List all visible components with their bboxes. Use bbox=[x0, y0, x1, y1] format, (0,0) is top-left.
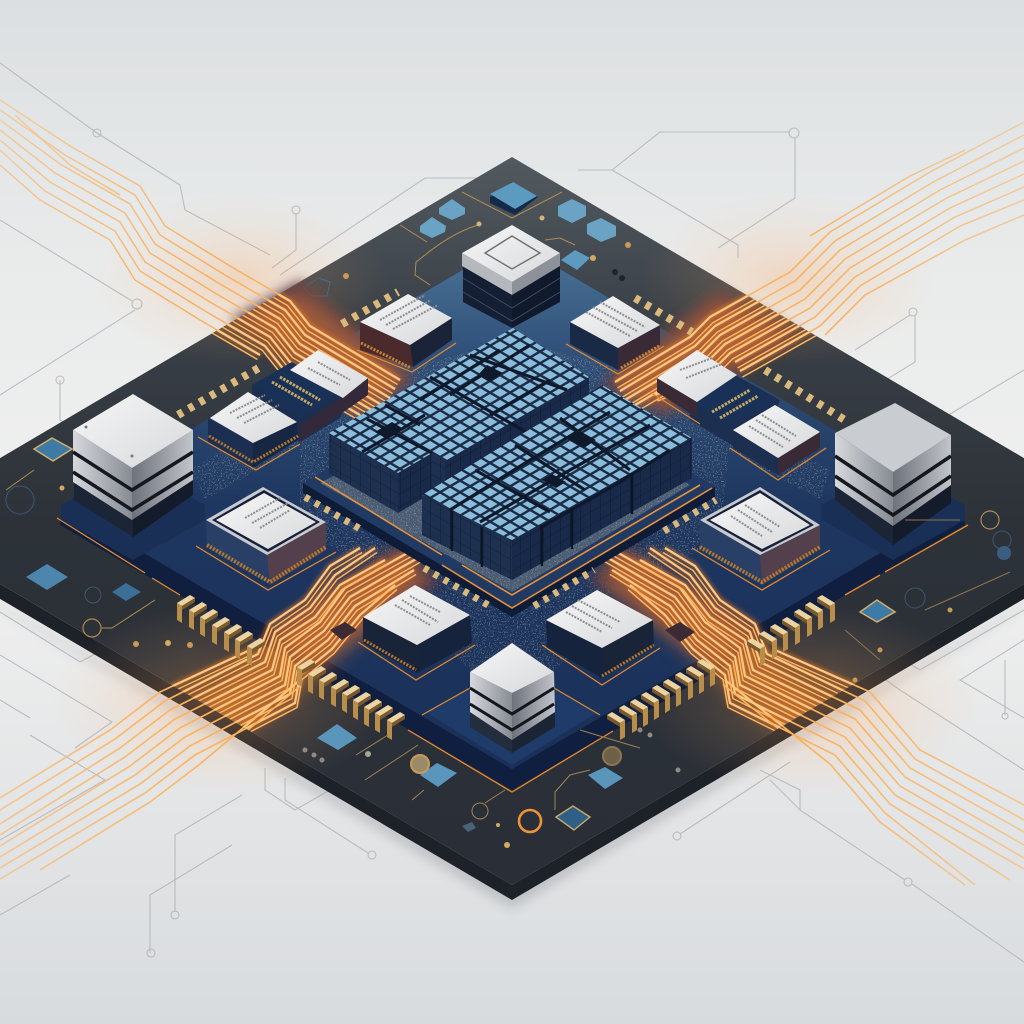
outer traces bbox=[0, 100, 1024, 885]
central memory block: lower bbox=[422, 385, 692, 580]
stack: bottom bbox=[422, 643, 600, 765]
big stack: right bbox=[822, 403, 965, 560]
chip: top left bbox=[357, 294, 456, 372]
chip cluster: left bbox=[198, 350, 368, 470]
stack: top bbox=[462, 225, 560, 328]
trace pad shadows bbox=[230, 280, 800, 670]
board detail: blue hexagons and pads, top bbox=[304, 182, 631, 296]
substrate: large blue package bbox=[57, 241, 968, 792]
chip: mid left bbox=[196, 487, 336, 590]
chip: mid right bbox=[692, 487, 830, 590]
gold contact pins bbox=[177, 595, 835, 740]
board shadow bbox=[0, 545, 1024, 908]
chip: bottom left bbox=[330, 585, 475, 680]
big stack: left bbox=[61, 394, 205, 560]
chip: top right bbox=[566, 296, 664, 374]
small gold pads bbox=[178, 292, 848, 422]
substrate speckle bbox=[190, 340, 830, 690]
on-board bright traces bbox=[172, 294, 854, 732]
central chip base bbox=[303, 362, 716, 617]
chip: bottom right bbox=[542, 590, 695, 685]
on-board orange haze bbox=[180, 290, 840, 740]
on-board trace glow bbox=[168, 292, 858, 731]
chip cluster: right bbox=[650, 350, 826, 480]
outer glow washes bbox=[50, 195, 980, 795]
board bbox=[0, 157, 1024, 900]
board detail: lower left components bbox=[6, 438, 1011, 848]
central memory block: upper bbox=[329, 328, 589, 513]
